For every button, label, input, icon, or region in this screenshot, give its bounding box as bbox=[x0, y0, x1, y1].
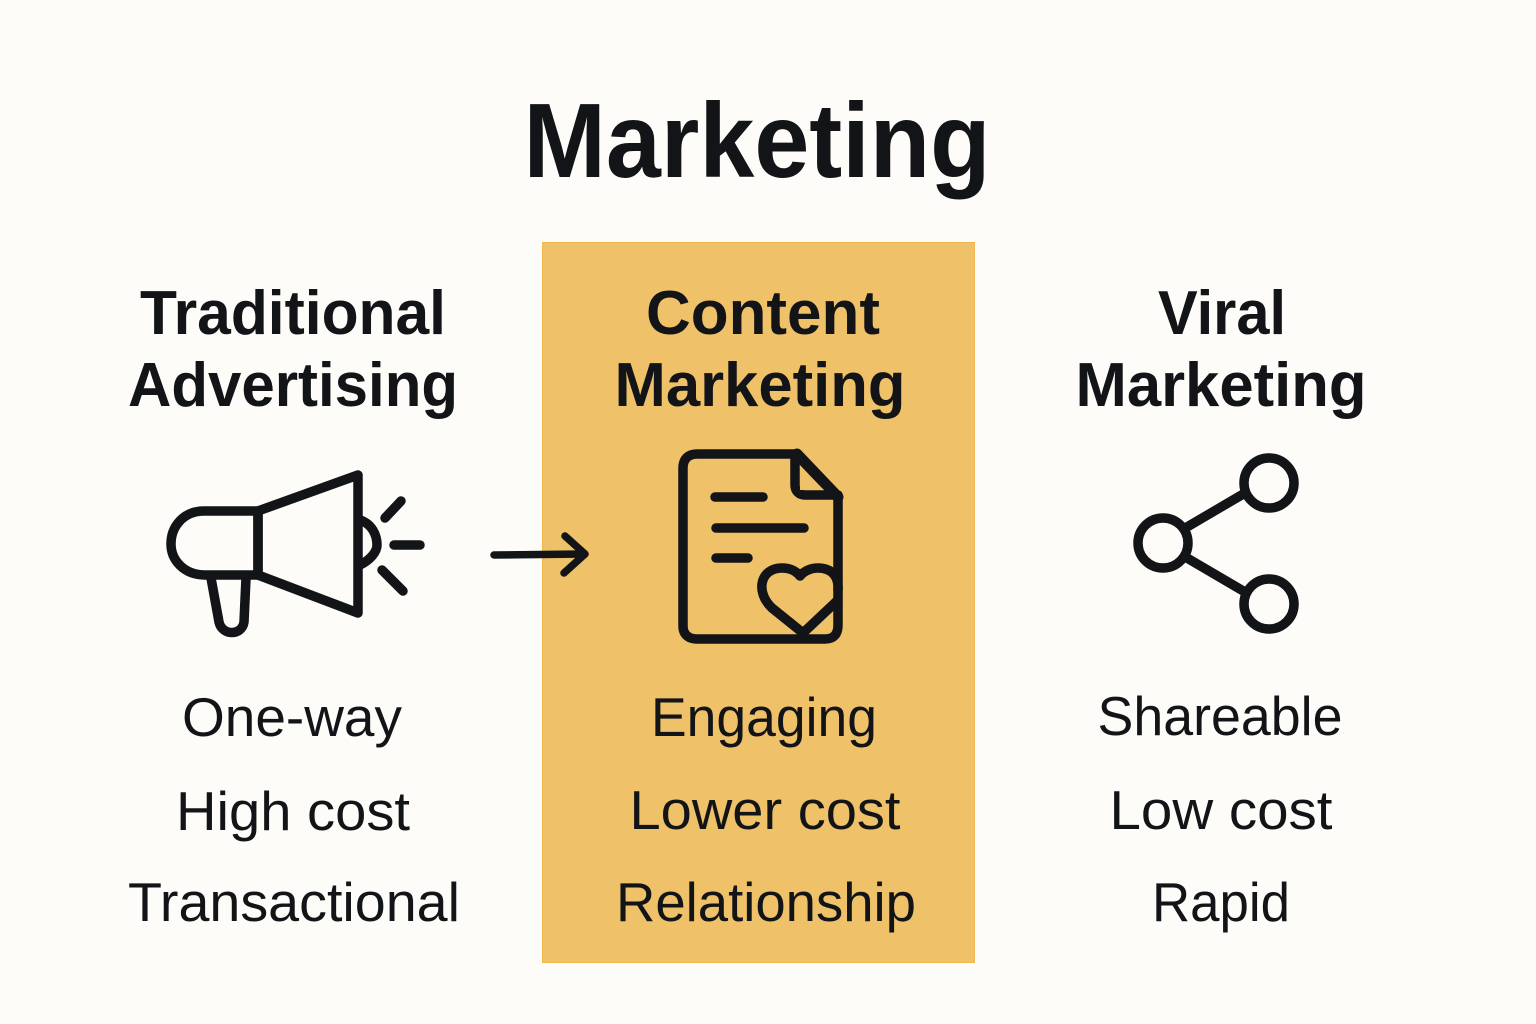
heading: traditional advertising: Advertising bbox=[128, 351, 458, 420]
heading: content marketing bbox=[614, 279, 906, 420]
arrow: traditional to content bbox=[494, 536, 585, 573]
heading: viral marketing bbox=[1076, 279, 1366, 420]
panel: content marketing highlight bbox=[542, 242, 974, 962]
title: Marketing bbox=[524, 82, 990, 200]
list: viral traits: Shareable bbox=[1098, 685, 1342, 747]
list: traditional traits bbox=[128, 686, 460, 933]
heading: traditional advertising bbox=[128, 279, 458, 420]
list: content traits bbox=[616, 686, 916, 933]
list: content traits: Relationship bbox=[616, 871, 916, 933]
icon: share network bbox=[1138, 458, 1294, 629]
icon: megaphone bbox=[171, 475, 420, 632]
heart bbox=[762, 568, 838, 633]
heading: content marketing: Content bbox=[646, 279, 880, 348]
heading: content marketing: Marketing bbox=[614, 351, 906, 420]
list: viral traits bbox=[1098, 685, 1342, 933]
heading: traditional advertising: Traditional bbox=[140, 279, 446, 348]
list: traditional traits: High cost bbox=[176, 780, 410, 842]
icon: document with heart bbox=[683, 454, 838, 639]
fold window bbox=[800, 467, 824, 490]
document outline bbox=[683, 454, 838, 639]
heading: viral marketing: Viral bbox=[1158, 279, 1286, 348]
list: viral traits: Rapid bbox=[1152, 871, 1290, 933]
list: content traits: Lower cost bbox=[630, 779, 900, 841]
text lines bbox=[715, 497, 804, 558]
list: traditional traits: One-way bbox=[182, 686, 402, 748]
heading: viral marketing: Marketing bbox=[1076, 351, 1366, 420]
list: traditional traits: Transactional bbox=[128, 871, 460, 933]
list: content traits: Engaging bbox=[651, 686, 877, 748]
list: viral traits: Low cost bbox=[1110, 779, 1332, 841]
